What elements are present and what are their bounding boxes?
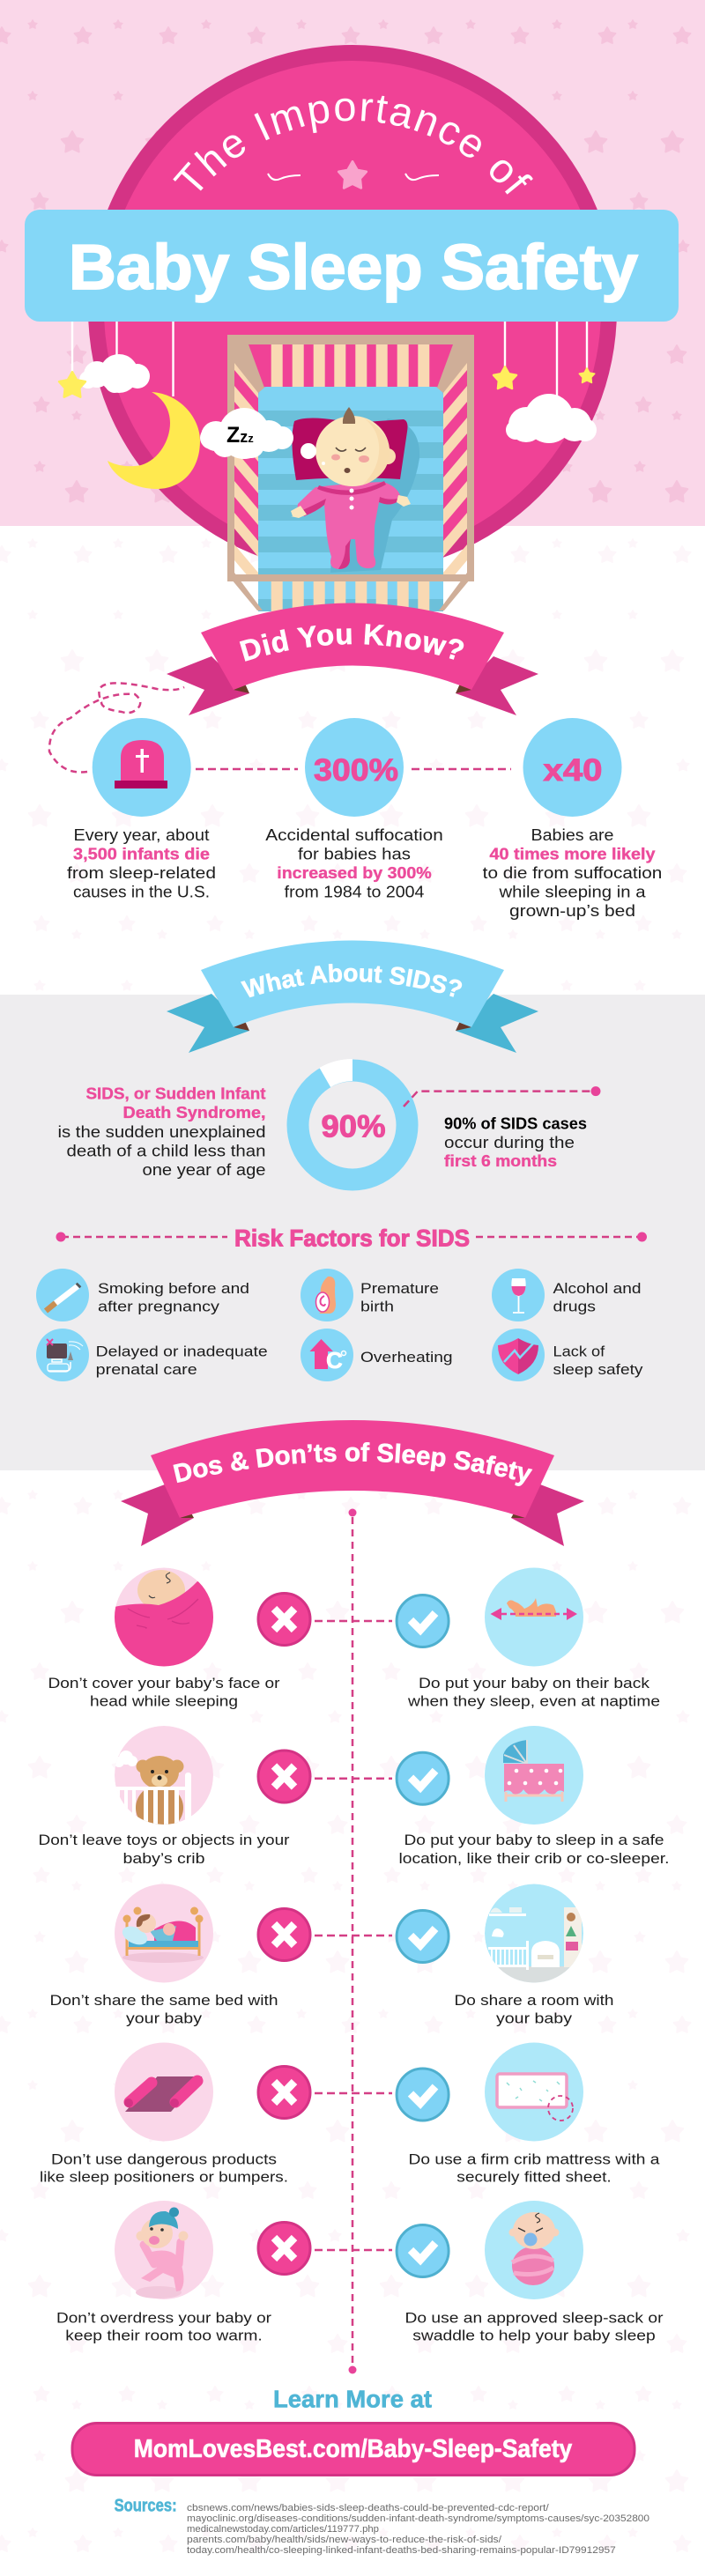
risk: prenatal care: Delayed or inadequate (96, 1344, 268, 1360)
icon: sleep cloud: Zzz (226, 423, 254, 448)
stat: x40: to die from suffocation (483, 864, 662, 882)
stat: x40: x40 (543, 753, 603, 788)
picture: nursery room (485, 1884, 583, 1984)
picture: bassinet (485, 1726, 583, 1825)
icon: wine glass (511, 1278, 526, 1313)
risk: premature birth (301, 1269, 439, 1321)
stat: 300%: from 1984 to 2004 (285, 883, 424, 900)
ribbon: Did You Know? (167, 603, 538, 715)
ribbon: What About SIDS?: What About SIDS? (241, 964, 462, 997)
text: do and don't 1: head while sleeping (90, 1693, 238, 1710)
heading: Learn More at: Learn More at (273, 2386, 432, 2413)
text: do and don't 2: location, like their crib or co-sleeper. (398, 1850, 670, 1867)
text: do and don't 3: Don’t share the same bed with (49, 1992, 278, 2009)
stat: x40: grown-up’s bed (509, 902, 635, 920)
icon: temperature arrow (310, 1339, 345, 1373)
button: cross (258, 1593, 449, 1647)
pillow (292, 418, 407, 480)
text: do and don't 4: securely fitted sheet. (456, 2169, 612, 2186)
picture: firm mattress (485, 2042, 583, 2141)
text: do and don't 2 (39, 1832, 670, 1867)
icon: left star (59, 372, 85, 397)
crib right side (437, 335, 474, 611)
stat: 300%: Accidental suffocation (265, 826, 443, 844)
donut chart: 90% (298, 1059, 407, 1180)
risk: prenatal care: prenatal care (96, 1361, 197, 1378)
text: do and don't 4: Don’t use dangerous products (51, 2151, 277, 2168)
stat: 300%: for babies has (298, 846, 411, 863)
baby body (291, 481, 411, 569)
stat: 3,500 infants: Every year, about (74, 826, 210, 844)
sources: parents.com/baby/health/sids/new-ways-to-reduce-the-risk-of-sids/ (187, 2535, 502, 2545)
icon: star and squiggles (268, 161, 439, 188)
text: 90% of SIDS cases: 90% of SIDS cases (444, 1114, 587, 1132)
picture: mother and baby in bed (115, 1884, 213, 1982)
row 4: sleep positioner (40, 2042, 660, 2186)
text: 90% of SIDS cases (444, 1114, 587, 1170)
risk: overheating (301, 1329, 453, 1381)
risk: alcohol and drugs: Alcohol and (553, 1280, 642, 1297)
icon: pregnant belly (315, 1277, 336, 1314)
stat: 300%: increased by 300% (277, 864, 432, 882)
text: SIDS definition: death of a child less than (67, 1142, 266, 1159)
text: do and don't 1: Do put your baby on their back (419, 1675, 650, 1691)
title banner (25, 210, 679, 322)
stat: 3,500 infants: from sleep-related (67, 864, 216, 882)
stat: 300% (265, 718, 443, 900)
text: do and don't 3: Do share a room with (455, 1992, 613, 2009)
icon: moon (108, 392, 200, 489)
text: SIDS definition (58, 1085, 266, 1179)
row 1: face covered (48, 1568, 660, 1710)
heading: Risk Factors for SIDS: Risk Factors for SIDS (234, 1225, 470, 1252)
button: cross (258, 1908, 449, 1963)
text: 90% of SIDS cases: occur during the (444, 1134, 575, 1151)
row 2: toys in crib (39, 1726, 670, 1867)
stat: x40 (483, 718, 662, 920)
risk: premature birth: birth (360, 1299, 394, 1315)
picture: swaddled baby (485, 2201, 583, 2299)
text: do and don't 3 (49, 1992, 613, 2027)
crib mattress (258, 387, 443, 611)
icon: left cloud (79, 354, 150, 393)
heading: Risk Factors for SIDS (56, 1225, 647, 1252)
risk: prenatal care (36, 1329, 268, 1381)
crib left side (227, 335, 264, 611)
text: do and don't 1 (48, 1675, 660, 1710)
risk: smoking: Smoking before and (98, 1280, 249, 1297)
icon: right cloud (506, 394, 597, 443)
stat: x40: Babies are (531, 826, 613, 844)
button: cross (258, 2222, 449, 2276)
text: SIDS definition: Death Syndrome, (123, 1104, 266, 1121)
ribbon: Did You Know?: Did You Know? (240, 624, 464, 662)
text: do and don't 5: swaddle to help your baby sleep (412, 2328, 656, 2344)
text: do and don't 2: baby’s crib (123, 1850, 204, 1867)
text: do and don't 5: keep their room too warm. (65, 2328, 263, 2344)
text: do and don't 2: Do put your baby to sleep in a safe (404, 1832, 664, 1848)
stat: 300%: 300% (314, 753, 398, 788)
risk: alcohol and drugs: drugs (553, 1299, 596, 1315)
row 5: overdressed baby (56, 2201, 664, 2344)
risk: premature birth: Premature (360, 1280, 439, 1297)
stat: 3,500 infants: 3,500 infants die (73, 846, 210, 863)
stat: 3,500 infants (67, 718, 216, 900)
crib slats (271, 344, 429, 611)
crib top and bottom rails (227, 335, 474, 581)
text: SIDS definition: SIDS, or Sudden Infant (86, 1085, 266, 1103)
risk: lack of sleep safety: sleep safety (553, 1361, 643, 1378)
icon: cigarette (46, 1284, 79, 1311)
risk: overheating: Overheating (360, 1349, 453, 1366)
picture: teddy bear in crib (114, 1726, 213, 1831)
icon: tombstone (115, 740, 167, 788)
text: do and don't 2: Don’t leave toys or objects in your (39, 1832, 290, 1848)
button: cross (258, 2067, 449, 2121)
button: cross (258, 1751, 449, 1804)
sources: today.com/health/co-sleeping-linked-infant-deaths-bed-sharing-remains-popular-ID79912957 (187, 2545, 616, 2556)
risk: lack of sleep safety: Lack of (553, 1344, 605, 1360)
text: SIDS definition: one year of age (143, 1161, 266, 1179)
ribbon: Dos and Don'ts (121, 1420, 584, 1546)
risk: smoking (36, 1269, 249, 1321)
picture: covered baby (115, 1568, 213, 1667)
sources: medicalnewstoday.com/articles/119777.php (187, 2524, 379, 2535)
text: SIDS definition: is the sudden unexplained (58, 1123, 266, 1141)
text: do and don't 5: Don’t overdress your baby or (56, 2310, 271, 2327)
ribbon: Dos and Don'ts: Dos & Don’ts of Sleep Safety (173, 1442, 532, 1486)
stat: x40: 40 times more likely (490, 846, 656, 863)
icon: sleep cloud (200, 408, 293, 459)
picture: positioner (115, 2042, 213, 2141)
button: website link (72, 2423, 634, 2476)
illustration: crib with sleeping baby (227, 335, 474, 611)
mobile strings (72, 317, 587, 396)
title: The Importance of: The Importance of (173, 95, 533, 195)
icon: temperature arrow: C (326, 1347, 343, 1373)
vertical dashed timeline (349, 1508, 356, 2373)
sources: Sources: (115, 2497, 177, 2516)
risk: alcohol and drugs (492, 1269, 642, 1321)
ribbon: What About SIDS? (167, 941, 538, 1053)
sources: mayoclinic.org/diseases-conditions/sudden-infant-death-syndrome/symptoms-causes/syc-20352800 (187, 2513, 649, 2524)
sources (115, 2497, 649, 2556)
baby shadow (330, 418, 419, 573)
baby head (301, 407, 396, 486)
text: do and don't 4 (40, 2151, 660, 2186)
icon: right stars (494, 366, 595, 389)
text: 90% of SIDS cases: first 6 months (444, 1152, 557, 1170)
text: do and don't 5: Do use an approved sleep-sack or (405, 2310, 664, 2327)
icon: broken shield (498, 1338, 538, 1374)
text: do and don't 1: when they sleep, even at naptime (407, 1693, 660, 1710)
text: do and don't 3: your baby (496, 2010, 573, 2027)
dashed connector: squiggle and stat lines (49, 683, 511, 773)
icon: ultrasound machine (47, 1339, 83, 1372)
risk: lack of sleep safety (492, 1329, 643, 1381)
picture: overdressed baby (115, 2201, 213, 2299)
button: website link: MomLovesBest.com/Baby-Sleep-Safety (134, 2435, 572, 2463)
picture: baby on back (485, 1568, 583, 1667)
sources: cbsnews.com/news/babies-sids-sleep-deaths-could-be-prevented-cdc-report/ (187, 2503, 550, 2513)
donut chart: 90%: 90% (321, 1110, 386, 1144)
risk: smoking: after pregnancy (98, 1299, 220, 1315)
stat: 3,500 infants: causes in the U.S. (73, 883, 210, 900)
title banner: Baby Sleep Safety (69, 233, 638, 303)
text: do and don't 3: your baby (126, 2010, 203, 2027)
text: do and don't 5 (56, 2310, 664, 2344)
text: do and don't 4: like sleep positioners or bumpers. (40, 2169, 288, 2186)
header medallion circle (88, 45, 617, 574)
row 3: shared bed (49, 1884, 613, 2027)
text: do and don't 4: Do use a firm crib mattress with a (409, 2151, 660, 2168)
text: do and don't 1: Don’t cover your baby’s face or (48, 1675, 280, 1691)
callout leader line (404, 1086, 601, 1107)
stat: x40: while sleeping in a (498, 883, 647, 900)
